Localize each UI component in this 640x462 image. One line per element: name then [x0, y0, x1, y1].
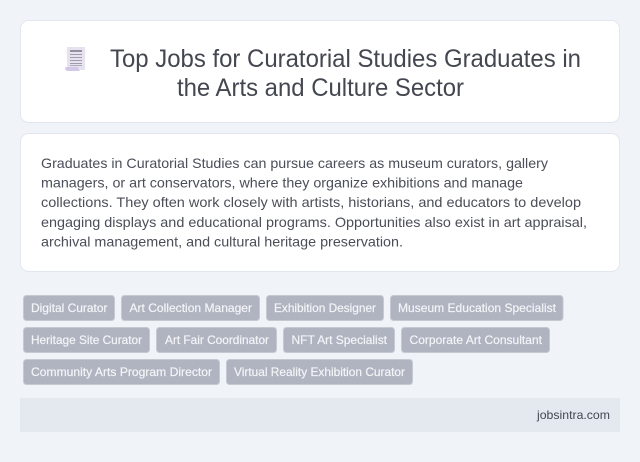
tag: Art Fair Coordinator [156, 328, 276, 352]
tag: Community Arts Program Director: Community Arts Program Director [31, 365, 212, 379]
text block: description paragraph: Graduates in Curatorial Studies can pursue careers as museum curators, gallery [41, 155, 548, 171]
footer source text: jobsintra.com [536, 408, 610, 422]
tag: Museum Education Specialist: Museum Education Specialist [398, 301, 557, 315]
title: Top Jobs for Curatorial Studies Graduates in [110, 45, 581, 73]
tag: Virtual Reality Exhibition Curator: Virtual Reality Exhibition Curator [234, 365, 405, 379]
text block: description paragraph: managers, or art conservators, where they organize exhibitions and manage [41, 174, 523, 190]
panel: header card [20, 20, 620, 122]
text block: description paragraph: archival management, and cultural heritage preservation. [41, 234, 403, 250]
text block: description paragraph [41, 155, 587, 250]
tag: Digital Curator: Digital Curator [31, 301, 108, 315]
tag: Heritage Site Curator: Heritage Site Curator [31, 333, 142, 347]
text block: description paragraph: collections. They often work closely with artists, historians, and educators to develop [41, 194, 581, 210]
tag: Art Fair Coordinator: Art Fair Coordinator [165, 333, 269, 347]
tag: Digital Curator [24, 296, 114, 320]
tag: Virtual Reality Exhibition Curator [226, 360, 412, 384]
panel: job tags [24, 296, 563, 384]
tag: Corporate Art Consultant: Corporate Art Consultant [410, 333, 543, 347]
tag: Museum Education Specialist [390, 296, 563, 320]
text block: description paragraph: engaging displays and educational programs. Opportunities also exist in art appraisal, [41, 214, 587, 230]
title [110, 45, 581, 102]
tag: Art Collection Manager [122, 296, 260, 320]
icon: document scroll [65, 47, 85, 71]
tag: Community Arts Program Director [24, 360, 220, 384]
footer bar [20, 398, 620, 432]
panel: description [20, 134, 620, 272]
tag: Heritage Site Curator [24, 328, 150, 352]
tag: Corporate Art Consultant [402, 328, 550, 352]
tag: NFT Art Specialist: NFT Art Specialist [292, 333, 388, 347]
tag: Art Collection Manager: Art Collection Manager [130, 301, 252, 315]
tag: Exhibition Designer: Exhibition Designer [274, 301, 376, 315]
title: the Arts and Culture Sector [177, 74, 464, 102]
tag: NFT Art Specialist [284, 328, 394, 352]
tag: Exhibition Designer [266, 296, 384, 320]
